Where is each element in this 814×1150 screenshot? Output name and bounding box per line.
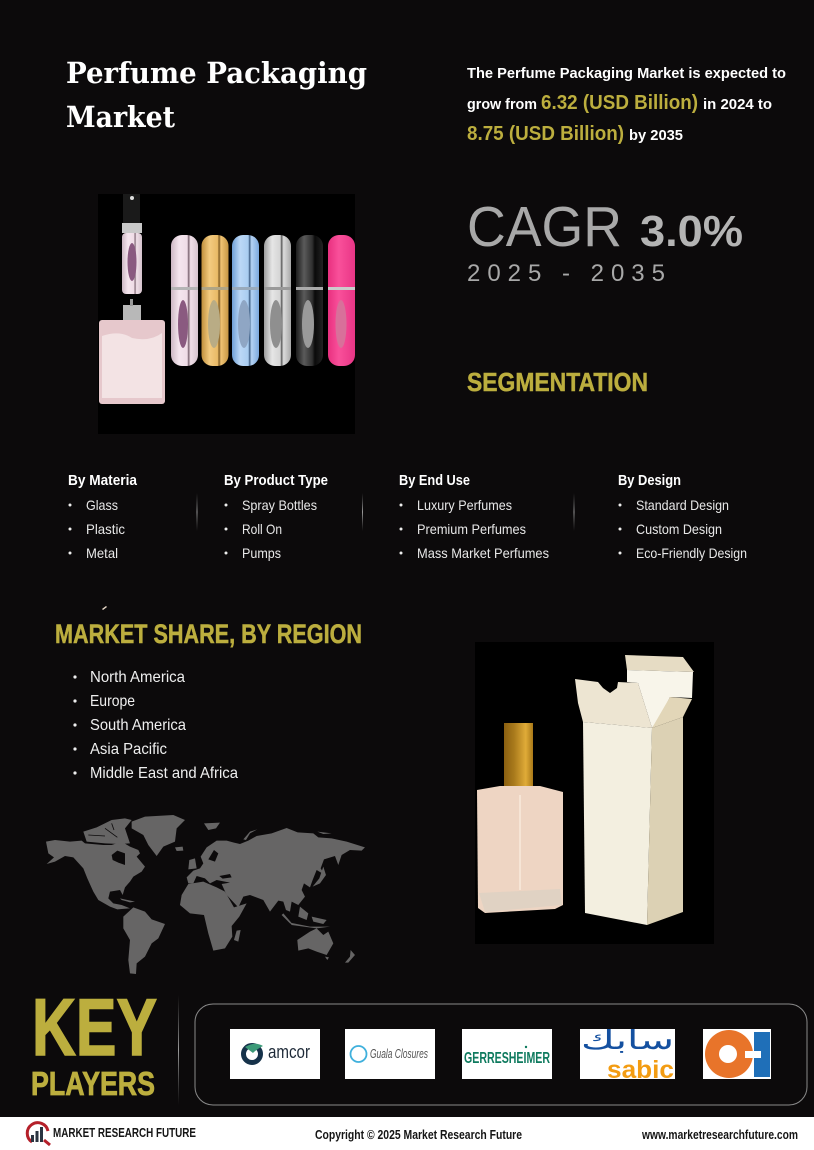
logo: Guala Closures — [345, 1029, 435, 1079]
segment: by material: Plastic — [86, 521, 125, 537]
segment: by design — [618, 472, 747, 561]
footer copyright: Copyright © 2025 Market Research Future — [315, 1127, 522, 1142]
logo: amcor: amcor — [268, 1042, 310, 1062]
segment: by material — [68, 472, 138, 561]
black atomizer — [296, 235, 323, 366]
CAGR — [467, 195, 743, 287]
segment: by product type: Spray Bottles — [242, 497, 317, 513]
market forecast text: grow from — [467, 96, 537, 113]
gold capped bottle — [477, 723, 563, 913]
segment: by product type: Roll On — [242, 521, 282, 537]
key players label: KEY — [32, 983, 157, 1073]
CAGR: CAGR — [467, 195, 622, 259]
logo: O-I — [703, 1029, 771, 1079]
logo: SABIC: سابك — [581, 1026, 674, 1056]
logo: SABIC — [580, 1026, 675, 1084]
gold atomizer — [202, 235, 228, 366]
segment: by end use: Premium Perfumes — [417, 521, 526, 537]
market forecast text: 8.75 (USD Billion) — [467, 123, 624, 145]
region list: Asia Pacific — [90, 741, 167, 758]
market forecast text: by 2035 — [629, 127, 683, 144]
region list: South America — [90, 717, 186, 734]
segment: by material: Glass — [86, 497, 118, 513]
region list: North America — [90, 669, 185, 686]
logo: Guala Closures: Guala Closures — [370, 1046, 428, 1061]
segment: by design: By Design — [618, 472, 681, 489]
logo: Gerresheimer — [462, 1029, 552, 1079]
silver atomizer — [264, 235, 291, 366]
footer — [0, 1117, 814, 1150]
atomizer with spray head — [122, 194, 142, 294]
market forecast text: The Perfume Packaging Market is expected to — [467, 65, 786, 82]
region list: Middle East and Africa — [90, 765, 238, 782]
title: Market — [66, 100, 176, 134]
segment: by material: By Materia — [68, 472, 138, 489]
market forecast text — [467, 65, 786, 145]
segment: by product type: Pumps — [242, 545, 281, 561]
segment: by end use: By End Use — [399, 472, 470, 489]
segment: by design: Custom Design — [636, 521, 722, 537]
title: Perfume Packaging — [66, 56, 367, 90]
market forecast text: 6.32 (USD Billion) — [541, 92, 698, 114]
key players label — [31, 983, 157, 1102]
segment: by design: Eco-Friendly Design — [636, 545, 747, 561]
segment: by product type — [224, 472, 328, 561]
key players label: PLAYERS — [31, 1065, 155, 1102]
segmentation heading: SEGMENTATION — [467, 367, 648, 397]
footer brand name: MARKET RESEARCH FUTURE — [53, 1125, 196, 1140]
CAGR: 3.0% — [640, 207, 743, 256]
image: perfume atomizers and bottle — [98, 194, 355, 434]
glass perfume bottle — [99, 299, 165, 404]
market forecast text: in 2024 to — [703, 96, 772, 113]
logo: SABIC: sabic — [607, 1056, 674, 1084]
segment: by end use: Mass Market Perfumes — [417, 545, 549, 561]
region list — [73, 669, 238, 782]
image: perfume bottle and carton box — [475, 642, 714, 944]
logo: Gerresheimer: GERRESHEIMER — [464, 1050, 550, 1067]
segment: by material: Metal — [86, 545, 118, 561]
region list: Europe — [90, 693, 135, 710]
carton box — [575, 655, 694, 925]
segment: by design: Standard Design — [636, 497, 729, 513]
hot pink atomizer — [328, 235, 355, 366]
world map — [46, 815, 365, 974]
footer logo icon — [27, 1123, 50, 1145]
key players panel — [195, 1004, 807, 1105]
logo: amcor — [230, 1029, 320, 1079]
segment: by end use: Luxury Perfumes — [417, 497, 512, 513]
blue atomizer — [232, 235, 259, 366]
CAGR: 2025 - 2035 — [467, 260, 665, 287]
segment: by end use — [399, 472, 549, 561]
pink atomizer — [171, 235, 198, 366]
segment: by product type: By Product Type — [224, 472, 328, 489]
market share heading: MARKET SHARE, BY REGION — [55, 619, 362, 649]
